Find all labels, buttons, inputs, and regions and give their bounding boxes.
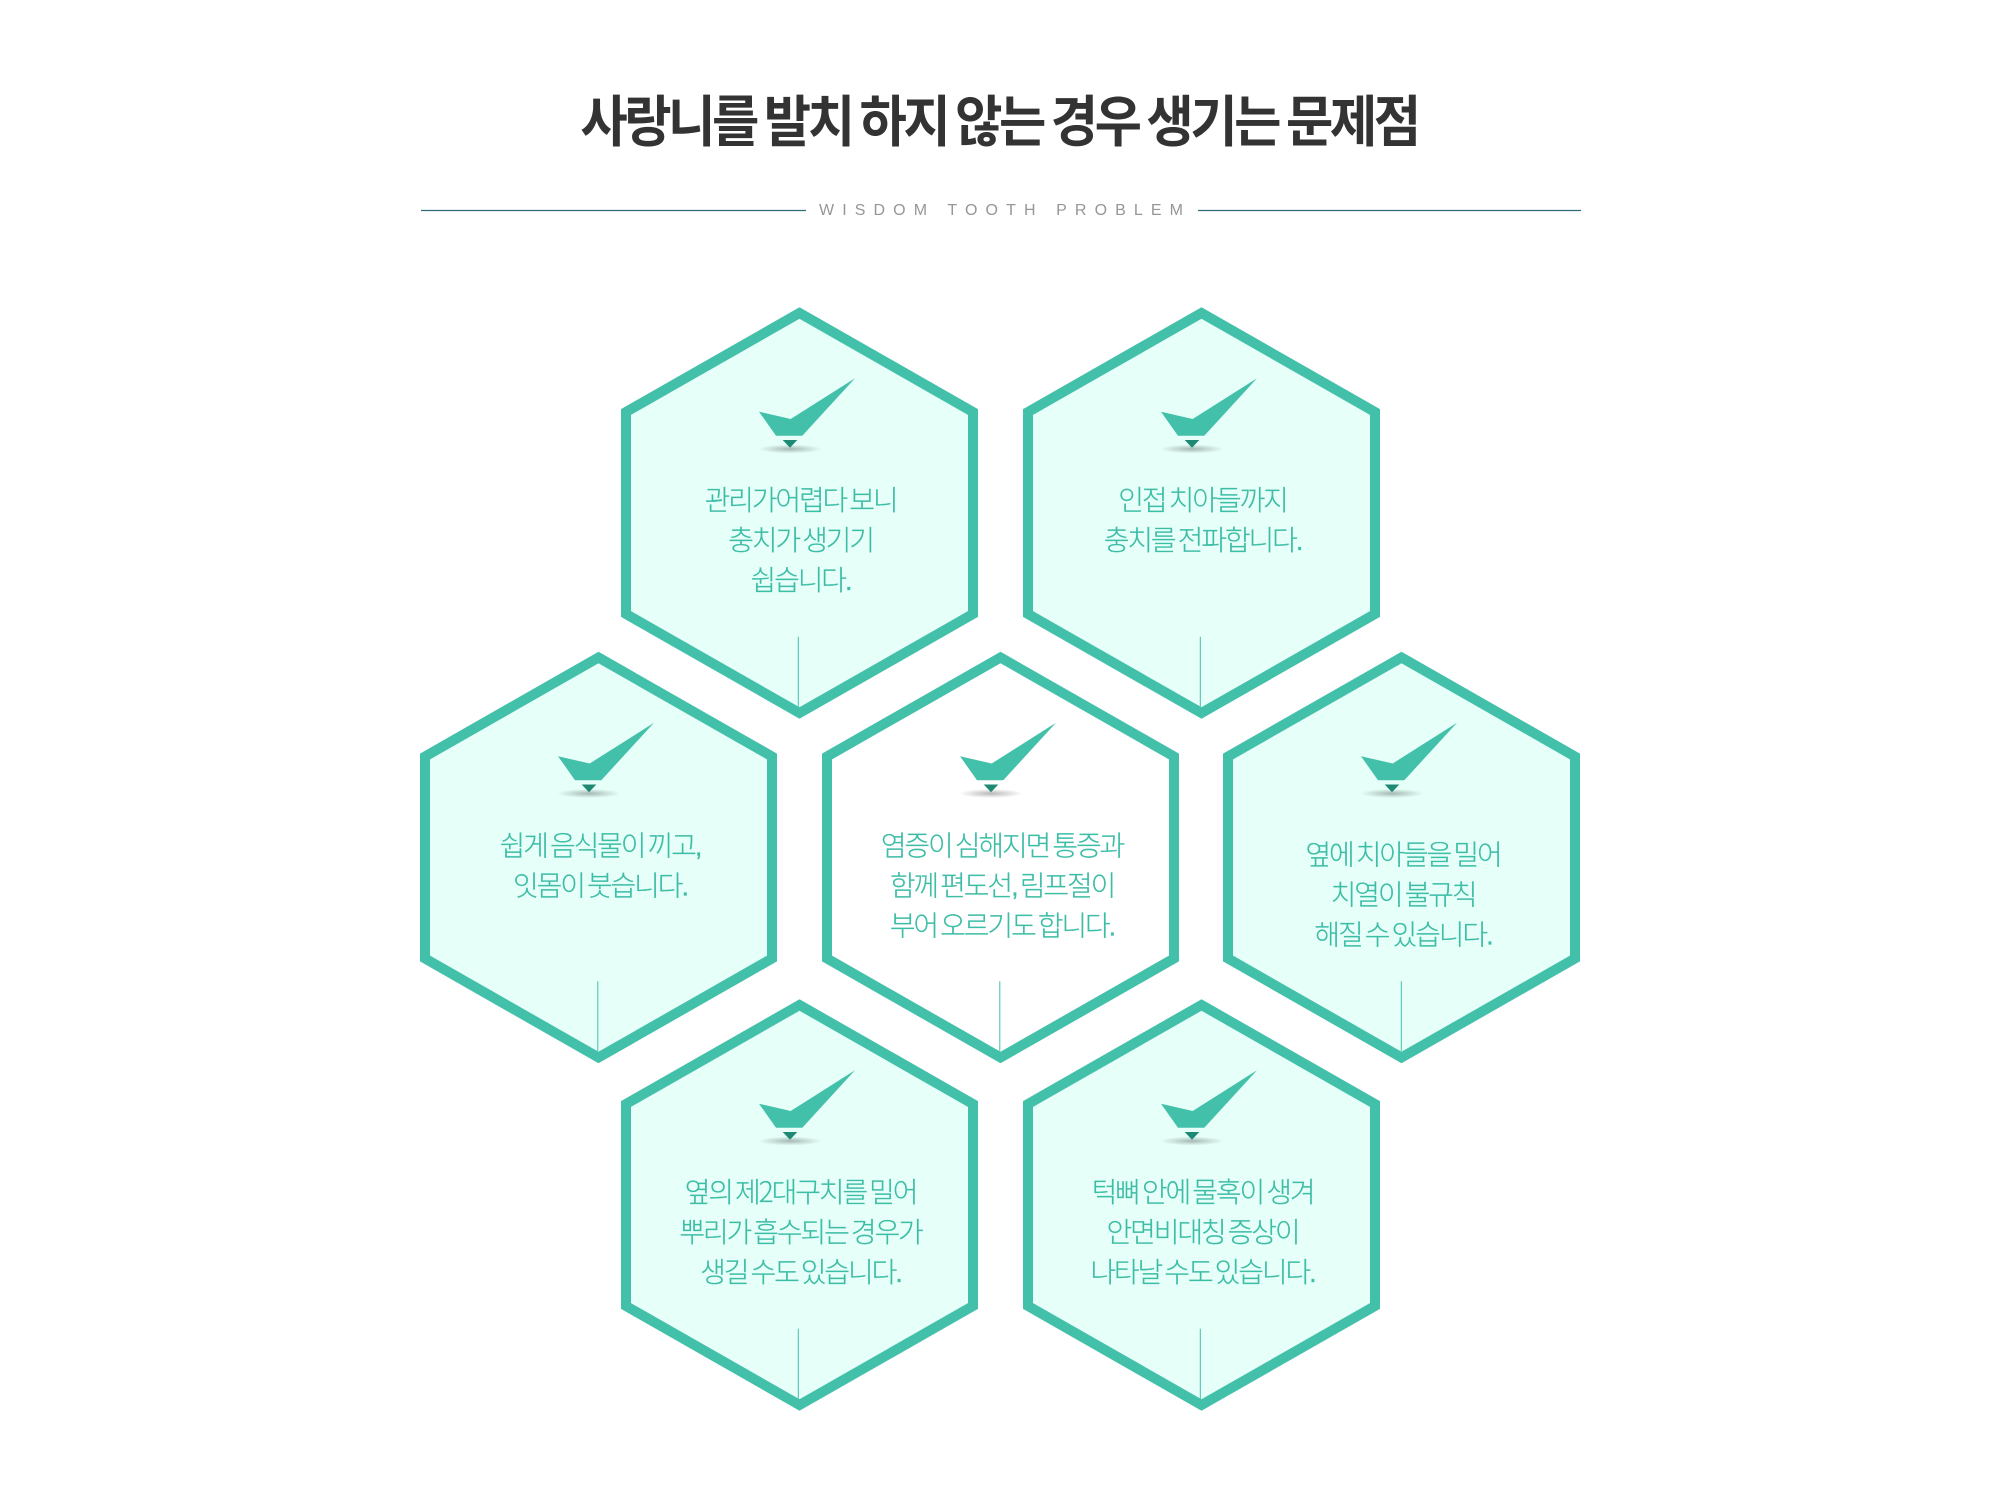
text: 5: 치열이 불규칙 <box>1331 880 1475 910</box>
text: 7: 나타날 수도 있습니다. <box>1090 1257 1315 1288</box>
panel: hexagon 2 <box>1028 313 1375 713</box>
text: 6: 생길 수도 있습니다. <box>700 1257 901 1288</box>
text: 1: 쉽습니다. <box>750 565 851 596</box>
text: 1: 충치가 생기기 <box>728 525 873 556</box>
subtitle with rules: WISDOM TOOTH PROBLEM <box>819 202 1183 219</box>
text: 7: 안면비대칭 증상이 <box>1106 1217 1299 1248</box>
text: 2: 인접 치아들까지 <box>1118 485 1287 516</box>
text: 4: 염증이 심해지면 통증과 <box>881 830 1125 862</box>
text: 2: 충치를 전파합니다. <box>1104 525 1302 556</box>
title: 사랑니를 발치 하지 않는 경우 생기는 문제점 <box>580 92 1418 154</box>
text: 7: 턱뼈 안에 물혹이 생겨 <box>1092 1177 1313 1208</box>
icon: check mark <box>1160 378 1257 454</box>
text: 1: 관리가어렵다 보니 <box>704 485 897 516</box>
panel: hexagon 7 <box>1028 1005 1375 1405</box>
text: 3: 잇몸이 붓습니다. <box>513 870 687 902</box>
text: 4: 부어 오르기도 합니다. <box>890 910 1115 942</box>
icon: check mark <box>758 1070 855 1146</box>
panel: hexagon 5 <box>1228 658 1575 1058</box>
text: 4: 함께 편도선, 림프절이 <box>890 870 1114 902</box>
panel: hexagon 6 <box>626 1005 973 1405</box>
icon: check mark <box>758 378 855 454</box>
panel: hexagon 4 center <box>827 658 1174 1058</box>
text: 3: 쉽게 음식물이 끼고, <box>500 830 701 862</box>
icon: check mark <box>1360 723 1457 798</box>
text: 5: 해질 수 있습니다. <box>1314 920 1492 950</box>
text: 6: 뿌리가 흡수되는 경우가 <box>679 1217 923 1248</box>
icon: check mark <box>557 723 654 798</box>
panel: hexagon 3 <box>425 658 772 1058</box>
panel: hexagon 1 <box>626 313 973 713</box>
text: 5: 옆에 치아들을 밀어 <box>1305 840 1501 870</box>
text: 6: 옆의 제2대구치를 밀어 <box>685 1171 916 1211</box>
icon: check mark <box>959 723 1056 798</box>
icon: check mark <box>1160 1070 1257 1146</box>
